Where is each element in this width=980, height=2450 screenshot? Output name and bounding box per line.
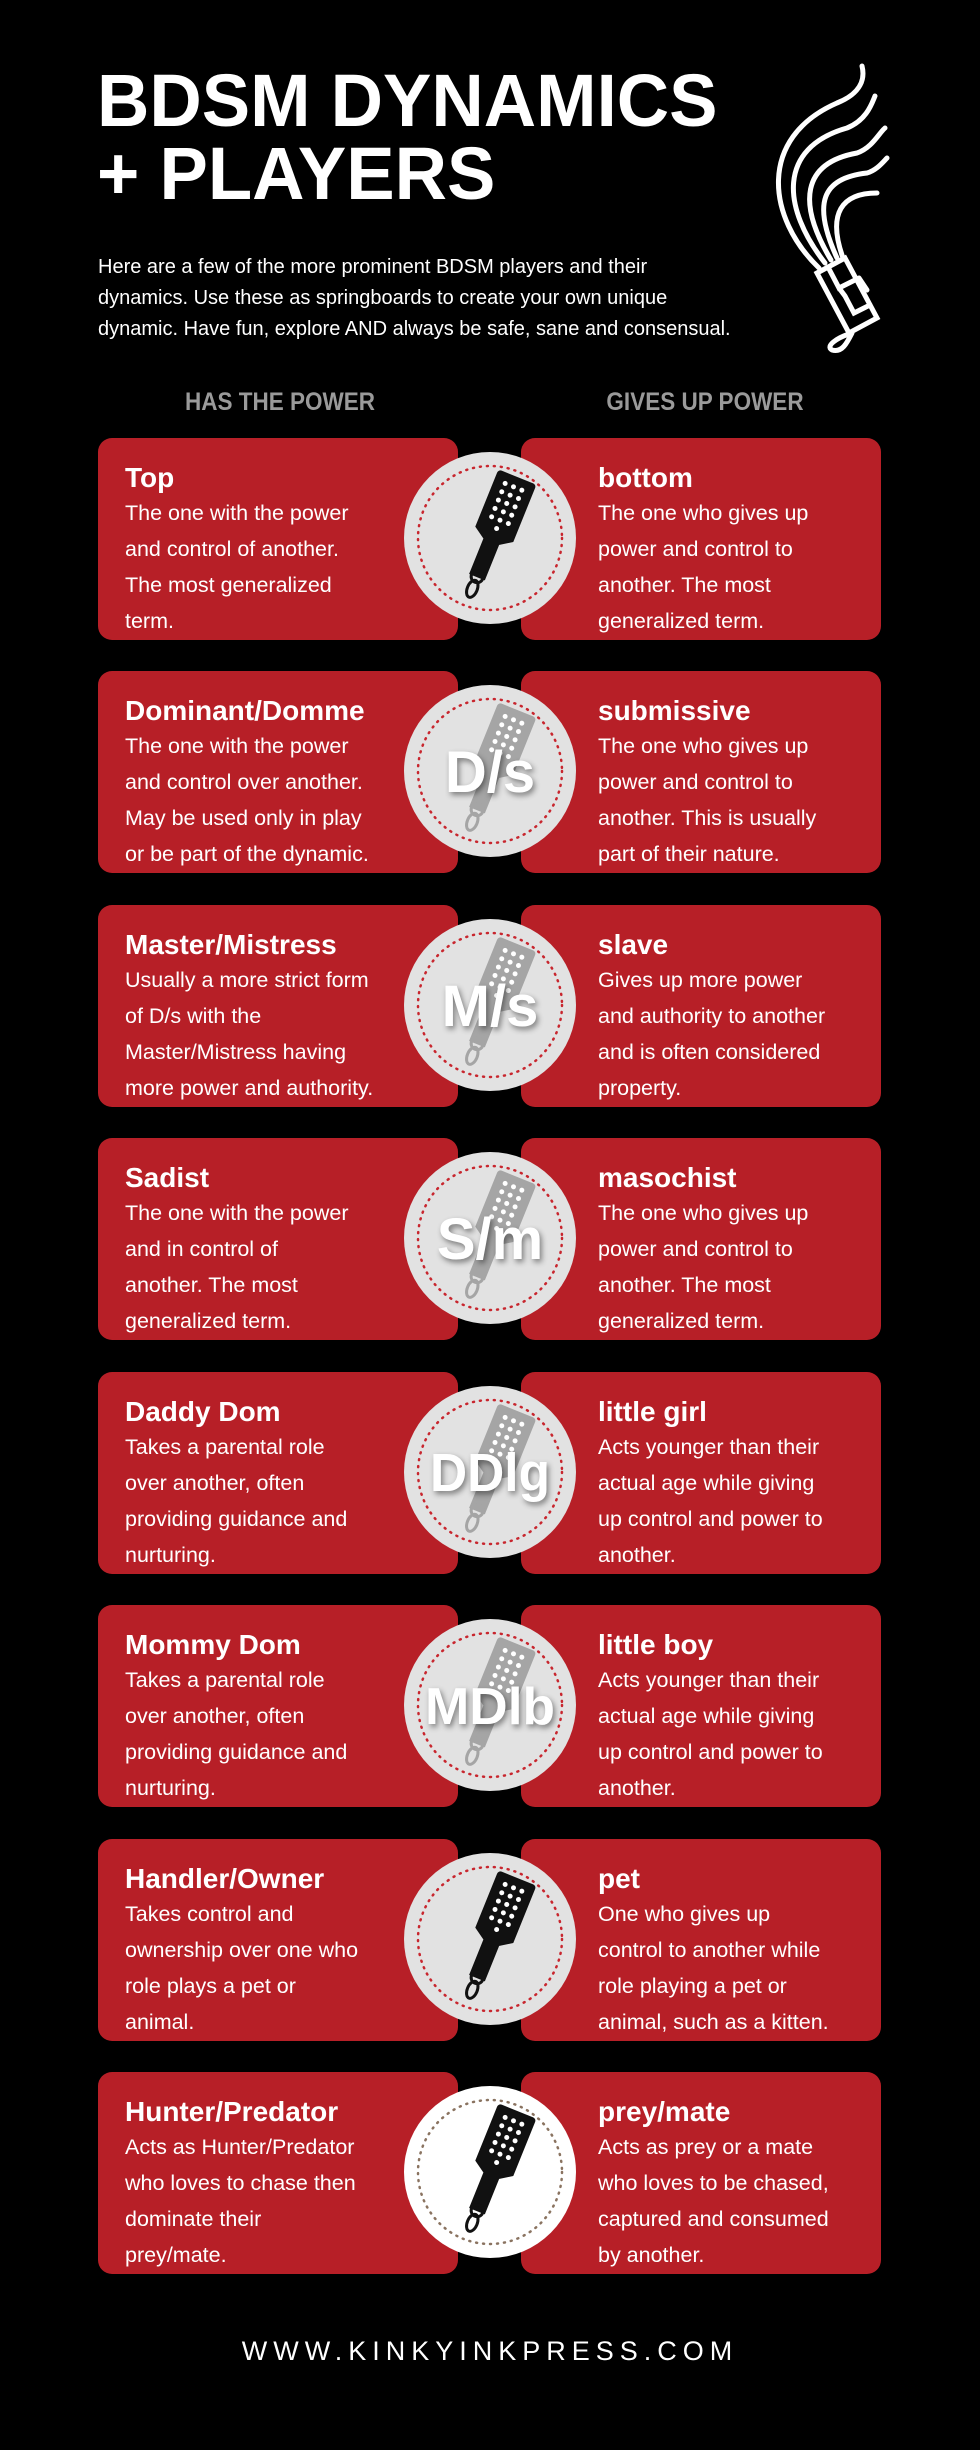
card: submissive: submissive (598, 695, 751, 726)
card: Hunter/Predator: dominate their (125, 2207, 261, 2231)
card: Handler/Owner: Handler/Owner (125, 1863, 324, 1894)
card: Master/Mistress: Master/Mistress having (125, 1040, 346, 1064)
icon: M/s circle (404, 919, 576, 1091)
intro text: dynamics. Use these as springboards to create your own unique (98, 287, 667, 309)
card: Dominant/Domme: or be part of the dynamic. (125, 842, 369, 866)
title: BDSM DYNAMICS (97, 59, 717, 142)
intro text: Here are a few of the more prominent BDSM players and their (98, 256, 647, 278)
card: Sadist: The one with the power (125, 1201, 348, 1225)
card: prey/mate: Acts as prey or a mate (598, 2135, 813, 2159)
card: pet: control to another while (598, 1938, 820, 1962)
card: masochist: another. The most (598, 1273, 771, 1297)
card: Sadist: Sadist (125, 1162, 209, 1193)
card: little boy (521, 1605, 881, 1807)
icon: S/m circle: S/m (437, 1207, 543, 1272)
card: slave: property. (598, 1076, 681, 1100)
title: + PLAYERS (97, 132, 495, 215)
card: Handler/Owner (98, 1839, 458, 2041)
card: slave: Gives up more power (598, 968, 802, 992)
card: Mommy Dom: nurturing. (125, 1776, 216, 1800)
card: Mommy Dom: over another, often (125, 1704, 304, 1728)
card: little boy: up control and power to (598, 1740, 823, 1764)
card: little girl: actual age while giving (598, 1471, 814, 1495)
card: slave (521, 905, 881, 1107)
card: pet: One who gives up (598, 1902, 770, 1926)
card: Top (98, 438, 458, 640)
card: little girl (521, 1372, 881, 1574)
icon: DDlg circle (404, 1386, 576, 1558)
card: prey/mate: by another. (598, 2243, 704, 2267)
card: Hunter/Predator: Acts as Hunter/Predator (125, 2135, 354, 2159)
card: Hunter/Predator: prey/mate. (125, 2243, 227, 2267)
card: slave: slave (598, 929, 668, 960)
card: Daddy Dom: Daddy Dom (125, 1396, 281, 1427)
card: little girl: up control and power to (598, 1507, 823, 1531)
card: Dominant/Domme: Dominant/Domme (125, 695, 365, 726)
icon: M/s circle: M/s (442, 974, 538, 1039)
card: Hunter/Predator (98, 2072, 458, 2274)
card: masochist: power and control to (598, 1237, 793, 1261)
card: Handler/Owner: ownership over one who (125, 1938, 358, 1962)
card: Daddy Dom: nurturing. (125, 1543, 216, 1567)
card: submissive: another. This is usually (598, 806, 816, 830)
card: little boy: another. (598, 1776, 676, 1800)
icon: MDlb circle (404, 1619, 576, 1791)
card: pet (521, 1839, 881, 2041)
card: little boy: little boy (598, 1629, 713, 1660)
card: Daddy Dom: providing guidance and (125, 1507, 347, 1531)
card: little boy: Acts younger than their (598, 1668, 819, 1692)
card: submissive: power and control to (598, 770, 793, 794)
icon: whip (776, 64, 890, 353)
card: little girl: Acts younger than their (598, 1435, 819, 1459)
card: Hunter/Predator: Hunter/Predator (125, 2096, 338, 2127)
card: Master/Mistress: of D/s with the (125, 1004, 261, 1028)
card: Mommy Dom: Mommy Dom (125, 1629, 301, 1660)
card: Dominant/Domme (98, 671, 458, 873)
card: prey/mate (521, 2072, 881, 2274)
card: bottom (521, 438, 881, 640)
card: Top: term. (125, 609, 174, 633)
card: Top: The one with the power (125, 501, 348, 525)
card: Mommy Dom: Takes a parental role (125, 1668, 325, 1692)
card: little girl: another. (598, 1543, 676, 1567)
card: bottom: The one who gives up (598, 501, 808, 525)
icon: D/s circle: D/s (445, 740, 535, 805)
card: Handler/Owner: Takes control and (125, 1902, 294, 1926)
card: prey/mate: prey/mate (598, 2096, 730, 2127)
card: Top: and control of another. (125, 537, 339, 561)
card: pet: role playing a pet or (598, 1974, 787, 1998)
card: Sadist: another. The most (125, 1273, 298, 1297)
row 4: Sadist / masochist (98, 1138, 881, 1340)
card: Mommy Dom: providing guidance and (125, 1740, 347, 1764)
card: Daddy Dom: over another, often (125, 1471, 304, 1495)
row 2: Dominant / submissive (98, 671, 881, 873)
row 8: Hunter / prey (98, 2072, 881, 2274)
heading: gives up power: GIVES UP POWER (606, 388, 804, 416)
card: masochist (521, 1138, 881, 1340)
card: Top: Top (125, 462, 174, 493)
card: Hunter/Predator: who loves to chase then (125, 2171, 356, 2195)
icon: D/s circle (404, 685, 576, 857)
intro text: dynamic. Have fun, explore AND always be safe, sane and consensual. (98, 318, 731, 340)
card: Handler/Owner: animal. (125, 2010, 194, 2034)
icon: MDlb circle: MDlb (425, 1678, 555, 1736)
card: Master/Mistress: Master/Mistress (125, 929, 337, 960)
card: bottom: power and control to (598, 537, 793, 561)
icon: paddle circle (404, 1853, 576, 2025)
card: bottom: another. The most (598, 573, 771, 597)
card: Top: The most generalized (125, 573, 332, 597)
card: submissive: The one who gives up (598, 734, 808, 758)
row 7: Handler / pet (98, 1839, 881, 2041)
card: little girl: little girl (598, 1396, 707, 1427)
card: Master/Mistress (98, 905, 458, 1107)
card: Sadist: generalized term. (125, 1309, 291, 1333)
card: Sadist: and in control of (125, 1237, 278, 1261)
card: submissive (521, 671, 881, 873)
card: Master/Mistress: more power and authority. (125, 1076, 373, 1100)
intro text (98, 256, 731, 340)
card: slave: and is often considered (598, 1040, 820, 1064)
card: Mommy Dom (98, 1605, 458, 1807)
card: prey/mate: who loves to be chased, (598, 2171, 829, 2195)
icon: paddle white circle (404, 2086, 576, 2258)
card: Handler/Owner: role plays a pet or (125, 1974, 296, 1998)
icon: S/m circle (404, 1152, 576, 1324)
row 3: Master / slave (98, 905, 881, 1107)
card: slave: and authority to another (598, 1004, 825, 1028)
icon: paddle circle (404, 452, 576, 624)
row 5: Daddy Dom / little girl (98, 1372, 881, 1574)
icon: DDlg circle: DDlg (430, 1443, 550, 1503)
card: pet: pet (598, 1863, 640, 1894)
card: Dominant/Domme: The one with the power (125, 734, 348, 758)
card: Dominant/Domme: May be used only in play (125, 806, 362, 830)
footer url: WWW.KINKYINKPRESS.COM (242, 2336, 738, 2366)
heading: has the power: HAS THE POWER (185, 388, 375, 416)
card: Daddy Dom (98, 1372, 458, 1574)
card: pet: animal, such as a kitten. (598, 2010, 829, 2034)
card: bottom: generalized term. (598, 609, 764, 633)
card: masochist: masochist (598, 1162, 736, 1193)
card: submissive: part of their nature. (598, 842, 780, 866)
card: bottom: bottom (598, 462, 693, 493)
card: Dominant/Domme: and control over another. (125, 770, 363, 794)
row 6: Mommy Dom / little boy (98, 1605, 881, 1807)
card: masochist: The one who gives up (598, 1201, 808, 1225)
card: little boy: actual age while giving (598, 1704, 814, 1728)
title (97, 59, 717, 215)
card: masochist: generalized term. (598, 1309, 764, 1333)
row 1: Top / bottom (98, 438, 881, 640)
card: Sadist (98, 1138, 458, 1340)
card: prey/mate: captured and consumed (598, 2207, 829, 2231)
card: Daddy Dom: Takes a parental role (125, 1435, 325, 1459)
card: Master/Mistress: Usually a more strict form (125, 968, 369, 992)
